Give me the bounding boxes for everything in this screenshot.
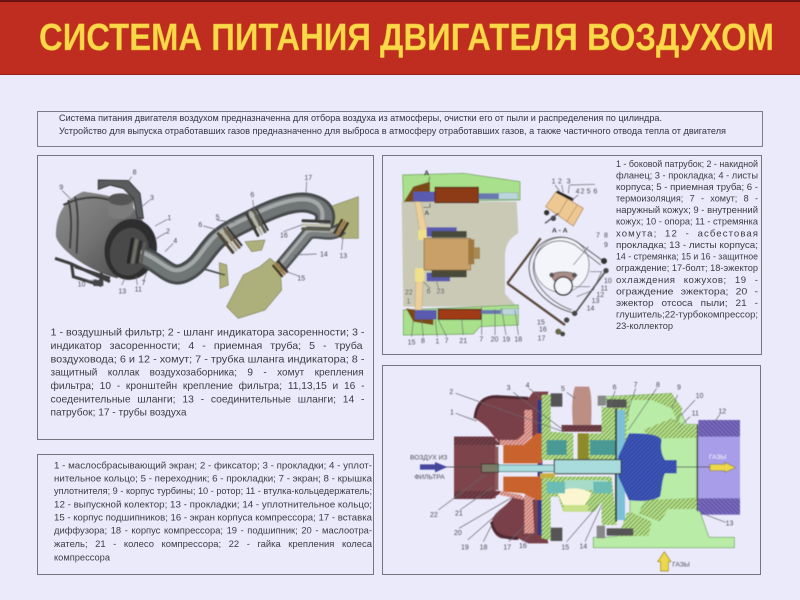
callout numbers: 3 <box>150 195 154 202</box>
panel: turbocharger section <box>382 366 760 574</box>
callout numbers: 1 <box>552 178 556 185</box>
arrow: air intake: ФИЛЬТРА <box>414 474 445 481</box>
oil adapter <box>562 387 602 460</box>
callout numbers: 3 <box>567 178 571 185</box>
exhaust legend text: прокладка; 13 - листы корпуса; <box>616 240 758 251</box>
callout numbers: 1 <box>450 409 454 416</box>
filter bracket <box>55 258 110 285</box>
callout numbers: 13 <box>118 289 126 296</box>
exhaust legend text: наружный кожух; 9 - внутренний <box>616 205 758 216</box>
exhaust legend text: термоизоляция; 7 - хомут; 8 - <box>616 194 758 204</box>
callout numbers: 12 <box>596 292 604 299</box>
callout numbers: 7 <box>634 382 638 389</box>
panel: introduction text: Система питания двигателя воздухом предназначенна для отбора воздуха из атмосферы, очистки его от пыли и распределения по цилиндра. <box>59 113 662 124</box>
callout numbers: 12 <box>718 408 726 415</box>
bolts <box>551 393 633 541</box>
callout numbers: 14 <box>579 543 587 550</box>
callout numbers: 18 <box>514 337 522 344</box>
top muffler <box>404 182 518 203</box>
filter body <box>56 192 143 278</box>
callout numbers: 18 <box>480 544 488 551</box>
callout numbers: 9 <box>59 185 63 192</box>
callout numbers: 8 <box>656 382 660 389</box>
exhaust legend text: 14 - стремянка; 15 и 16 - защитное <box>616 252 758 262</box>
callout numbers: 6 <box>198 222 202 229</box>
callout numbers: 13 <box>592 298 600 305</box>
callout numbers: 15 <box>561 544 569 551</box>
callout numbers: 4 <box>173 238 177 245</box>
callout numbers: 5 <box>216 215 220 222</box>
callout numbers: 14 <box>320 252 328 259</box>
callout numbers: 2 <box>166 228 170 235</box>
callout numbers: 23 <box>437 289 445 296</box>
arrow: exhaust gases in <box>658 552 690 571</box>
callout numbers: 6 <box>250 192 254 199</box>
callout numbers: 10 <box>78 282 86 289</box>
callout numbers: 9 <box>677 385 681 392</box>
gas outlet duct <box>696 420 740 515</box>
panel: turbocharger legend: 1 - маслосбрасывающий экран; 2 - фиксатор; 3 - прокладки; 4 - уплот- <box>54 460 372 472</box>
illustration: exhaust cross-section <box>402 168 612 347</box>
callout numbers: 2 <box>558 178 562 185</box>
callout numbers: 7 <box>596 233 600 240</box>
callout numbers: 5 <box>587 188 591 195</box>
section marks: А <box>424 168 430 177</box>
callout numbers: 21 <box>455 511 463 518</box>
panel: introduction text: Устройство для выпуска отработавших газов предназначенно для выброса в атмосферу отработавших газов, а также частичного отвода тепла от двигателя <box>59 126 726 137</box>
section marks <box>423 168 430 217</box>
exhaust legend text: глушитель;22-турбокомпрессор; <box>616 310 758 320</box>
green shrouds <box>403 173 520 202</box>
turbo and collector <box>415 202 480 310</box>
main air pipe <box>140 199 325 275</box>
pipe clamp upper <box>245 207 269 237</box>
callout numbers <box>405 178 612 347</box>
base plate and turbine housing <box>593 393 734 548</box>
callout numbers: 16 <box>519 543 527 550</box>
callout numbers: 3 <box>507 385 511 392</box>
filter intake <box>108 197 133 219</box>
pipe clamp lower <box>216 225 243 254</box>
panel: introduction text <box>38 112 762 146</box>
panel: turbocharger legend <box>38 454 374 574</box>
panel: turbocharger legend: уплотнителя; 9 - корпус турбины; 10 - ротор; 11 - втулка-кольцедержатель; <box>54 486 372 497</box>
callout numbers: 1 <box>167 215 171 222</box>
hose at compressor <box>271 260 289 278</box>
bottom muffler <box>406 308 518 325</box>
arrow: air intake: ВОЗДУХ ИЗ <box>410 455 447 462</box>
callout numbers <box>430 382 734 551</box>
callout numbers: 17 <box>304 175 312 182</box>
filter legend text: 1 - воздушный фильтр; 2 - шланг индикатора засоренности; 3 - <box>50 326 365 338</box>
exhaust legend text: 23-коллектор <box>616 321 673 332</box>
detail: section A-A clamp: А - А <box>552 227 568 234</box>
callout numbers: 6 <box>613 385 617 392</box>
callout numbers: 13 <box>339 253 347 260</box>
panel: turbocharger legend: нительное кольцо; 5 - переходник; 6 - прокладки; 7 - экран; 8 - крышка <box>54 474 373 484</box>
exhaust legend text: хомута; 12 - асбестовая <box>616 228 758 240</box>
callout numbers: 21 <box>459 338 467 345</box>
callout numbers: 15 <box>537 319 545 326</box>
callout numbers: 6 <box>427 289 431 296</box>
panel: turbocharger legend: жатель; 21 - колесо компрессора; 22 - гайка крепления колеса <box>54 539 373 550</box>
panel: turbocharger legend: компрессора <box>54 552 111 564</box>
callout numbers: 1 <box>435 339 439 346</box>
detail: section A-A clamp <box>507 227 609 336</box>
filter legend text: патрубок; 17 - трубы воздуха <box>50 406 187 418</box>
detail: flange joint <box>544 184 595 226</box>
callout numbers: 16 <box>539 327 547 334</box>
callout numbers: 6 <box>593 188 597 195</box>
callout numbers: 10 <box>604 278 612 285</box>
callout numbers: 16 <box>280 233 288 240</box>
callout numbers: 9 <box>604 242 608 249</box>
compressor wheel <box>495 433 542 500</box>
callout numbers: 4 <box>576 188 580 195</box>
callout numbers: 22 <box>405 289 413 296</box>
pipe 14 <box>279 227 342 267</box>
callout numbers: 7 <box>142 280 146 287</box>
callout numbers: 20 <box>491 337 499 344</box>
illustration: turbocharger cross-section <box>410 382 740 571</box>
callout numbers: 15 <box>297 275 305 282</box>
pipe clamp at bend <box>301 219 331 231</box>
arrow: exhaust gases out <box>709 454 736 472</box>
callout numbers: 7 <box>479 337 483 344</box>
olive engine plates <box>219 197 358 318</box>
arrow: exhaust gases out: ГАЗЫ <box>709 454 727 461</box>
callout numbers <box>59 170 347 296</box>
filter legend text: воздуховода; 6 и 12 - хомут; 7 - трубка шланга индикатора; 8 - <box>50 354 365 366</box>
callout numbers: 11 <box>601 285 608 292</box>
filter legend text: индикатор засоренности; 4 - приемная труба; 5 - труба <box>50 340 363 352</box>
panel: turbocharger legend: 12 - выпускной колектор; 13 - прокладки; 14 - уплотнительное кольцо; <box>54 500 372 510</box>
callout numbers: 13 <box>726 520 734 527</box>
filter legend text <box>50 326 365 418</box>
section marks: А <box>424 210 429 217</box>
panel: turbocharger legend: диффузора; 18 - корпус компрессора; 19 - подшипник; 20 - маслоотра- <box>54 526 372 536</box>
callout numbers: 8 <box>421 338 425 345</box>
arrow: air intake <box>410 455 447 481</box>
callout numbers: 5 <box>561 386 565 393</box>
turbine rotor <box>618 433 677 501</box>
callout numbers: 1 <box>407 298 411 305</box>
callout numbers: 4 <box>526 383 530 390</box>
exhaust legend text: кожух; 10 - опора; 11 - стремянка <box>616 216 759 228</box>
header banner <box>0 0 800 75</box>
hose on filter <box>126 237 147 266</box>
exhaust legend text: ограждение; 17-болт; 18-эжектор <box>616 263 758 274</box>
filter legend text: защитный коллак воздухозаборника; 9 - хомут крепления <box>50 366 364 378</box>
callout numbers: 22 <box>430 512 438 519</box>
callout numbers: 19 <box>502 337 510 344</box>
callout numbers: 11 <box>692 410 699 417</box>
callout numbers: 2 <box>581 188 585 195</box>
exhaust legend text: корпуса; 5 - приемная труба; 6 - <box>616 182 758 193</box>
filter end cap <box>99 214 162 285</box>
filter legend text: соеденительные шланги; 13 - соединительные шланги; 14 - <box>50 394 365 406</box>
callout numbers: 17 <box>503 544 511 551</box>
exhaust legend text <box>616 159 759 332</box>
illustration: air filter assembly <box>55 170 358 318</box>
exhaust legend text: ограждение эжектора; 20 - <box>616 286 758 298</box>
callout numbers: 11 <box>135 287 142 294</box>
engine body <box>402 202 518 307</box>
filter legend text: фильтра; 10 - кронштейн крепление фильтра; 11,13,15 и 16 - <box>50 380 365 392</box>
callout numbers: 17 <box>538 335 546 342</box>
panel: exhaust system <box>382 156 762 354</box>
shaft <box>445 460 710 478</box>
callout numbers: 15 <box>408 340 416 347</box>
arrow: exhaust gases in: ГАЗЫ <box>672 561 690 568</box>
callout numbers: 7 <box>445 338 449 345</box>
callout numbers: 10 <box>696 393 704 400</box>
exhaust legend text: охлаждения кожухов; 19 - <box>616 275 758 286</box>
panel: air filter and ducts <box>38 156 374 440</box>
compressor housing <box>454 392 548 543</box>
exhaust legend text: 1 - боковой патрубок; 2 - накидной <box>616 159 758 170</box>
callout numbers: 8 <box>604 233 608 240</box>
callout numbers: 14 <box>587 305 595 312</box>
bearing housing <box>542 394 627 540</box>
callout numbers: 19 <box>461 544 469 551</box>
exhaust legend text: эжектор отсоса пыли; 21 - <box>616 298 758 309</box>
panel: turbocharger legend: 15 - корпус подшипников; 16 - экран корпуса компрессора; 17 - вставка <box>54 512 373 524</box>
callout numbers: 20 <box>454 530 462 537</box>
exhaust legend text: фланец; 3 - прокладка; 4 - листы <box>616 170 758 182</box>
callout numbers: 8 <box>133 170 137 177</box>
callout numbers: 2 <box>449 389 453 396</box>
hose at manifold <box>333 218 349 238</box>
